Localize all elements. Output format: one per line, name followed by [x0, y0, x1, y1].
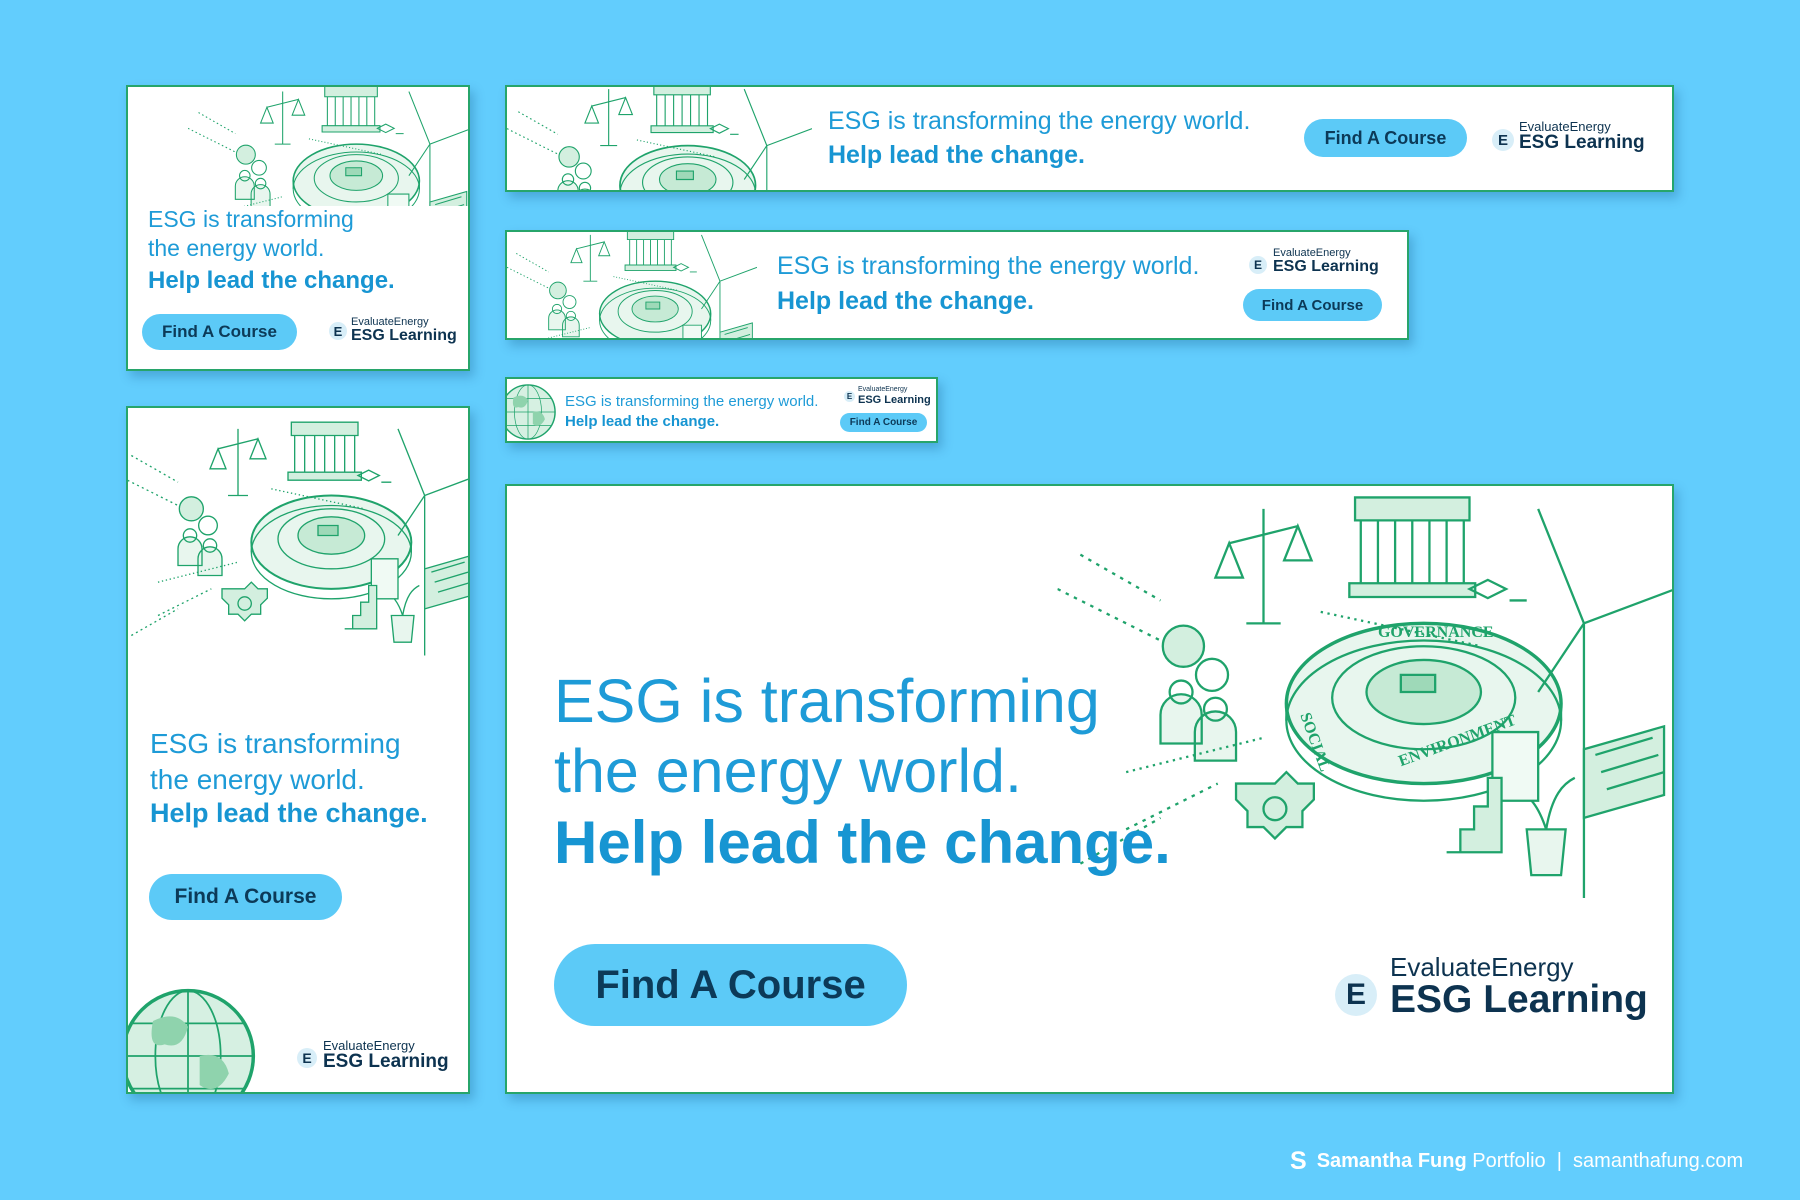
- logo: EvaluateEnergy: [858, 386, 907, 393]
- tagline: Help lead the change.: [148, 267, 395, 294]
- logo: [1335, 952, 1648, 1021]
- logo: EvaluateEnergy: [1273, 247, 1351, 259]
- illustration: [507, 87, 812, 190]
- panel: medium banner: [505, 230, 1409, 340]
- logo: [1249, 247, 1379, 275]
- button: [1243, 289, 1382, 321]
- tagline: Help lead the change.: [554, 809, 1171, 876]
- illustration: [128, 422, 468, 656]
- tagline: Help lead the change.: [828, 141, 1085, 169]
- text block: the energy world.: [150, 764, 365, 795]
- logo: ESG Learning: [1390, 978, 1648, 1021]
- text block: the energy world.: [148, 235, 324, 261]
- button: [149, 874, 342, 920]
- logo: [1492, 119, 1645, 153]
- button: [1304, 119, 1467, 157]
- logo: [844, 386, 931, 406]
- panel: tall skyscraper banner: [126, 406, 470, 1094]
- panel: small banner: [505, 377, 938, 443]
- logo: ESG Learning: [858, 394, 931, 406]
- logo: [297, 1038, 449, 1072]
- logo: E: [1346, 978, 1366, 1011]
- icon: globe: [128, 988, 256, 1092]
- panel: leaderboard banner: [505, 85, 1674, 192]
- button: Find A Course: [850, 417, 917, 428]
- tagline: Help lead the change.: [150, 798, 428, 828]
- headline text: [554, 667, 1100, 805]
- illustration: [507, 232, 757, 338]
- button: [142, 314, 297, 350]
- button: [840, 413, 927, 432]
- logo: ESG Learning: [1273, 258, 1379, 275]
- button: Find A Course: [162, 322, 277, 341]
- text block: [148, 206, 354, 261]
- button: [554, 944, 907, 1026]
- text block: ESG is transforming the energy world.: [565, 393, 818, 410]
- illustration: ESG scene with governance ring: SOCIAL: [1296, 710, 1333, 774]
- button: Find A Course: [595, 962, 866, 1006]
- logo: E: [1498, 132, 1508, 148]
- logo: EvaluateEnergy: [323, 1038, 415, 1053]
- footer credit: S: [1290, 1147, 1307, 1175]
- button: Find A Course: [1325, 128, 1446, 148]
- logo: E: [1254, 258, 1262, 272]
- text block: ESG is transforming the energy world.: [777, 252, 1199, 280]
- tagline: Help lead the change.: [777, 287, 1034, 315]
- headline text: the energy world.: [554, 737, 1022, 805]
- text block: ESG is transforming: [150, 728, 401, 759]
- logo: [329, 316, 457, 344]
- illustration: ESG scene with governance ring: [1058, 496, 1672, 898]
- logo: ESG Learning: [1519, 132, 1645, 153]
- text block: ESG is transforming the energy world.: [828, 107, 1250, 135]
- logo: E: [847, 392, 852, 401]
- button: Find A Course: [175, 885, 316, 908]
- headline text: ESG is transforming: [554, 667, 1100, 735]
- text block: [150, 728, 401, 795]
- text block: ESG is transforming: [148, 206, 354, 232]
- logo: E: [302, 1050, 312, 1066]
- footer credit: Samantha Fung Portfolio | samanthafung.com: [1317, 1150, 1743, 1172]
- logo: EvaluateEnergy: [351, 316, 429, 328]
- tagline: Help lead the change.: [565, 413, 719, 430]
- button: Find A Course: [1262, 296, 1363, 314]
- logo: ESG Learning: [323, 1051, 449, 1072]
- illustration: ESG scene with governance ring: ENVIRONMENT: [1396, 712, 1519, 770]
- logo: EvaluateEnergy: [1519, 119, 1611, 134]
- illustration: ESG scene with governance ring: GOVERNANCE: [1378, 624, 1494, 641]
- icon: globe: [507, 384, 556, 440]
- panel: square banner: [126, 85, 470, 371]
- panel: large banner: [505, 484, 1674, 1094]
- logo: EvaluateEnergy: [1390, 952, 1574, 982]
- logo: ESG Learning: [351, 327, 457, 344]
- logo: E: [334, 324, 342, 338]
- illustration: ESG scene: [188, 87, 468, 206]
